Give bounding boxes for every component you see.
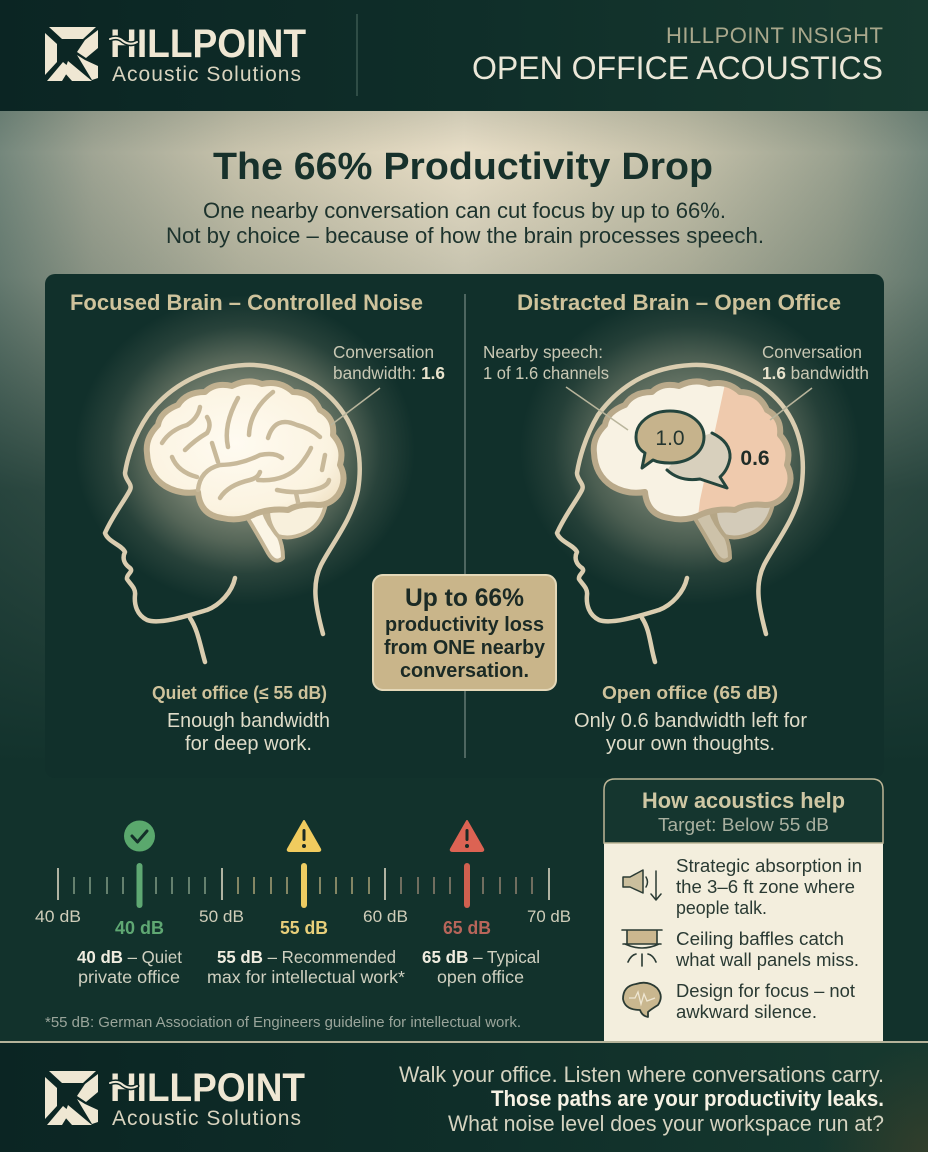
caption: quiet office: Quiet office (≤ 55 dB) [152, 683, 327, 703]
annotation: nearby speech: Nearby speech: [483, 342, 603, 362]
caption: open office [574, 683, 807, 755]
caption: quiet office: Enough bandwidth [167, 710, 330, 732]
panel heading: focused: Focused Brain – Controlled Noise [70, 290, 423, 315]
scale description: 55 dB: max for intellectual work* [207, 967, 405, 987]
annotation: conversation bandwidth: bandwidth: 1.6 [333, 363, 445, 383]
header eyebrow: HILLPOINT INSIGHT [666, 23, 883, 48]
annotation: conversation 1.6 bandwidth [762, 342, 869, 383]
caption: quiet office: for deep work. [185, 733, 312, 755]
text: ceiling baffles [675, 928, 859, 970]
logo mark [45, 1071, 98, 1125]
scale labels: 50 dB [199, 907, 244, 926]
scale description: 40 dB: 40 dB – Quiet [77, 947, 182, 967]
footer call to action [399, 1062, 884, 1136]
annotation: conversation 1.6 bandwidth: 1.6 bandwidth [762, 363, 869, 383]
wave through wordmark [110, 1082, 137, 1088]
marker: 65 dB [451, 821, 483, 908]
annotation: conversation bandwidth: Conversation [333, 342, 434, 362]
marker: 40 dB [124, 820, 155, 908]
illustration: focused brain [75, 295, 415, 662]
logo tagline: Acoustic Solutions [112, 1107, 301, 1130]
callout: 66% loss: from ONE nearby [384, 637, 546, 659]
annotation: nearby speech [483, 342, 609, 383]
caption: quiet office [152, 683, 330, 755]
icon: brain waveform [623, 983, 661, 1017]
wave through wordmark [110, 38, 137, 44]
bubble value 0.6: 0.6 [740, 447, 770, 470]
scale labels: 40 dB [35, 907, 81, 926]
footer call to action: Those paths are your productivity leaks. [491, 1086, 884, 1111]
logo tagline: Acoustic Solutions [112, 63, 301, 86]
callout: 66% loss: productivity loss [385, 614, 544, 636]
ruler ticks [58, 868, 549, 900]
speech bubble: 0.6 [667, 433, 730, 488]
text: ceiling baffles: Ceiling baffles catch [676, 928, 844, 949]
logo wordmark: HILLPOINT [110, 1066, 305, 1110]
caption: open office: Open office (65 dB) [602, 683, 778, 703]
text: design for focus: awkward silence. [676, 1001, 817, 1022]
text: design for focus: Design for focus – not [676, 980, 855, 1001]
scale labels: 60 dB [363, 907, 408, 926]
brain with split [594, 370, 807, 561]
panel: brain comparison [45, 274, 884, 778]
panel subheading: Target: Below 55 dB [658, 814, 829, 835]
footer band [0, 1041, 928, 1152]
icon: ceiling baffle [622, 930, 662, 966]
scale description: 55 dB [207, 947, 405, 987]
text: strategic absorption: the 3–6 ft zone where [676, 876, 855, 897]
scale description: 65 dB [422, 947, 540, 987]
leader line [331, 388, 380, 425]
panel heading: How acoustics help [642, 788, 845, 813]
header logo [45, 22, 306, 81]
marker: 55 dB [288, 821, 320, 908]
text: strategic absorption [676, 855, 862, 918]
footer call to action: Walk your office. Listen where conversations carry. [399, 1062, 884, 1087]
subtitle [166, 198, 764, 248]
scale description: 40 dB [77, 947, 182, 987]
subtitle: Not by choice – because of how the brain processes speech. [166, 223, 764, 248]
text: design for focus [676, 980, 855, 1022]
icon: speaker absorption [623, 870, 661, 900]
annotation: conversation 1.6 bandwidth: Conversation [762, 342, 862, 362]
subtitle: One nearby conversation can cut focus by up to 66%. [203, 198, 726, 223]
scale description: 55 dB: 55 dB – Recommended [217, 947, 396, 967]
speech bubble: 1.0 [636, 411, 704, 468]
head outline [105, 365, 360, 662]
chart: decibel scale [35, 820, 571, 938]
caption: open office: your own thoughts. [606, 733, 775, 755]
marker values: 40 dB [115, 918, 164, 938]
callout: 66% loss: conversation. [400, 660, 529, 682]
marker values: 65 dB [443, 918, 491, 938]
scale description: 65 dB: open office [437, 967, 524, 987]
marker values: 55 dB [280, 918, 328, 938]
text: ceiling baffles: what wall panels miss. [675, 949, 859, 970]
scale description: 65 dB: 65 dB – Typical [422, 947, 540, 967]
header band [0, 0, 928, 111]
text: strategic absorption: Strategic absorption in [676, 855, 862, 876]
footer call to action: What noise level does your workspace run at? [448, 1111, 884, 1136]
text: strategic absorption: people talk. [676, 897, 767, 918]
footnote: *55 dB: German Association of Engineers guideline for intellectual work. [45, 1014, 521, 1031]
main title: The 66% Productivity Drop [213, 146, 713, 188]
logo wordmark: HILLPOINT [110, 22, 306, 66]
annotation: nearby speech: 1 of 1.6 channels [483, 363, 609, 383]
bubble value 1.0: 1.0 [655, 427, 685, 450]
logo mark [45, 27, 98, 81]
callout: 66% loss: Up to 66% [405, 584, 524, 612]
header title: OPEN OFFICE ACOUSTICS [472, 50, 883, 86]
marker values [115, 918, 491, 938]
scale labels [35, 907, 571, 926]
illustration: distracted brain [534, 308, 846, 664]
footer logo [45, 1066, 305, 1125]
scale description: 40 dB: private office [78, 967, 180, 987]
callout: 66% loss [373, 575, 556, 690]
leader lines [566, 387, 812, 430]
panel: how acoustics help [604, 779, 883, 1042]
scale labels: 70 dB [527, 907, 571, 926]
panel heading: distracted: Distracted Brain – Open Office [517, 290, 841, 315]
head outline [557, 365, 803, 662]
annotation: conversation bandwidth [333, 342, 445, 383]
caption: open office: Only 0.6 bandwidth left for [574, 710, 807, 732]
brain [147, 381, 344, 561]
